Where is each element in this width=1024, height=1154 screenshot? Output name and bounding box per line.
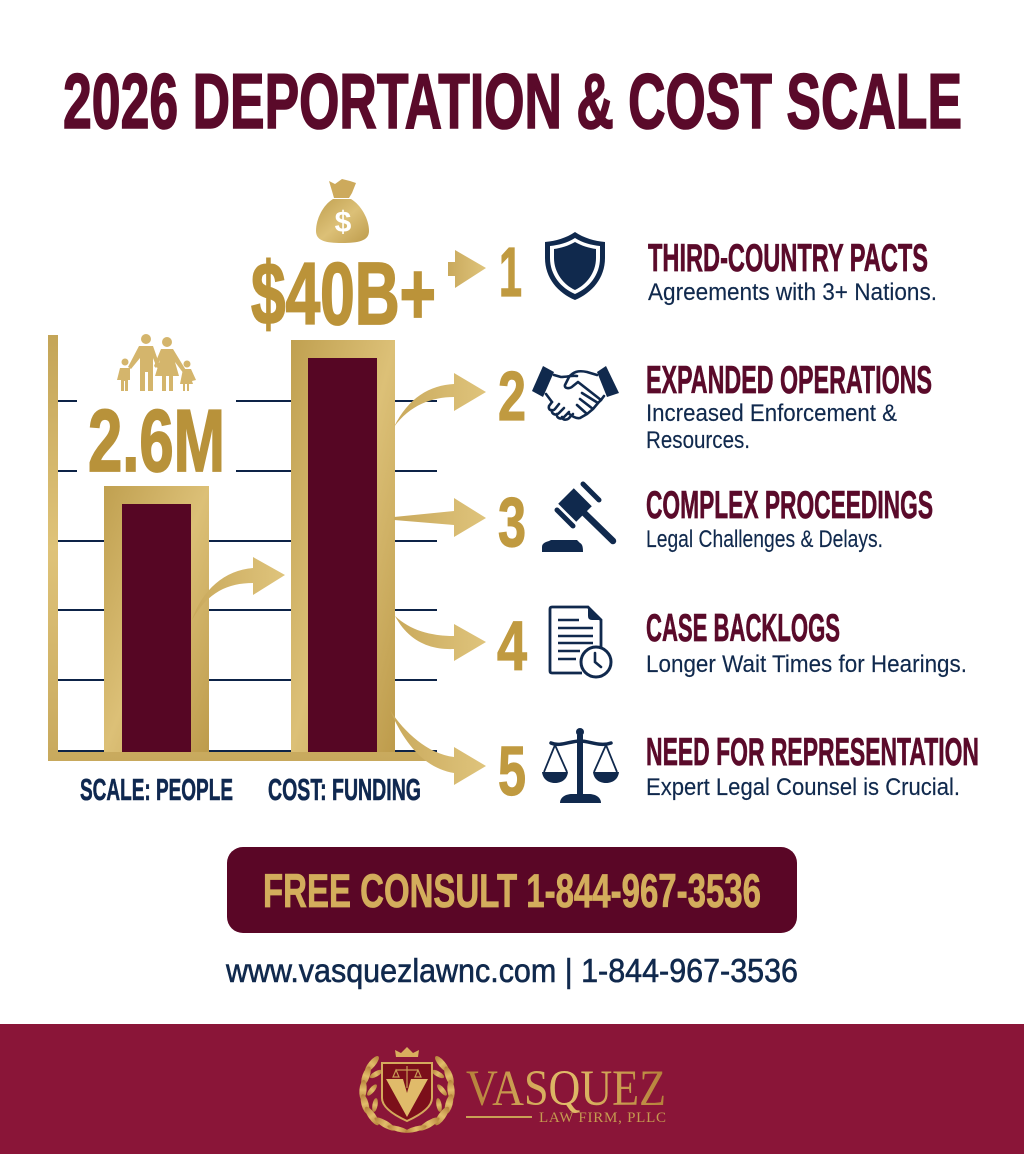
number 2: 2 (498, 357, 526, 435)
laurel left (359, 1054, 409, 1134)
arrow to item 3 (394, 498, 486, 537)
number 4: 4 (497, 607, 527, 685)
icon: family (117, 334, 196, 391)
icon: gavel (542, 484, 613, 552)
label: cost funding: COST: FUNDING (268, 772, 421, 807)
icon: shield (545, 232, 605, 300)
call to action button (227, 847, 797, 933)
icon: money bag (316, 179, 369, 243)
logo wordmark: VASQUEZ (466, 1061, 666, 1117)
call to action button: FREE CONSULT 1-844-967-3536 (263, 864, 761, 917)
item 3: complex proceedings (498, 483, 933, 561)
item 4: case backlogs (497, 607, 967, 685)
crown (395, 1047, 419, 1057)
logo emblem (359, 1047, 456, 1134)
description: Agreements with 3+ Nations. (648, 279, 937, 306)
item 2: expanded operations (498, 357, 932, 454)
logo subtitle: LAW FIRM, PLLC (539, 1110, 666, 1126)
arrow: people to funding (192, 557, 285, 620)
item 5: need for representation (498, 728, 979, 810)
bar: funding (291, 340, 395, 752)
description: Expert Legal Counsel is Crucial. (646, 774, 960, 801)
laurel right (405, 1054, 456, 1134)
number 5: 5 (498, 732, 526, 810)
chart axes (48, 335, 437, 761)
number 1: 1 (499, 233, 522, 311)
description: Longer Wait Times for Hearings. (646, 651, 967, 678)
number 3: 3 (498, 483, 526, 561)
arrow to item 1 (448, 250, 486, 288)
icon: scales of justice (542, 728, 619, 803)
contact line: www.vasquezlawnc.com | 1-844-967-3536 (225, 952, 798, 989)
logo rule (466, 1116, 532, 1118)
heading: CASE BACKLOGS (646, 607, 840, 650)
footer band (0, 1024, 1024, 1154)
arrow to item 4 (395, 616, 486, 661)
label: scale people: SCALE: PEOPLE (80, 772, 233, 807)
icon: money bag: $ (335, 206, 352, 239)
arrow to item 5 (390, 710, 486, 785)
bar chart: scale versus cost (48, 244, 437, 807)
scales emblem (393, 1066, 421, 1088)
item 1: third-country pacts (499, 232, 937, 311)
arrow to item 2 (394, 373, 486, 427)
shield (382, 1063, 432, 1121)
monogram V (386, 1079, 428, 1117)
icon: document with clock (550, 607, 611, 677)
value: 2.6M: 2.6M (88, 391, 225, 490)
description: Increased Enforcement & (646, 400, 897, 427)
icon: handshake (532, 366, 619, 420)
description line 2: Resources. (646, 427, 750, 454)
description: Legal Challenges & Delays. (646, 526, 883, 553)
bar: people (104, 486, 209, 752)
value: $40B+: $40B+ (251, 244, 436, 343)
